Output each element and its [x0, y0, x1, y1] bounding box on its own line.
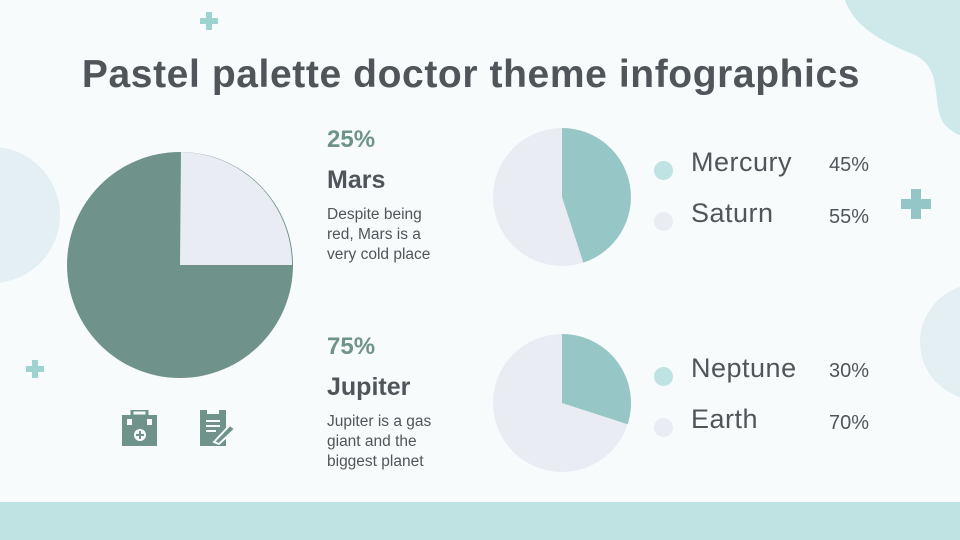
- legend: Mercury/Saturn: 45%: [829, 154, 869, 176]
- text block: Mars: Mars: [327, 166, 385, 194]
- text block: Mars: 25%: [327, 126, 375, 153]
- title: Pastel palette doctor theme infographics: [82, 53, 860, 96]
- icon: medical kit: [122, 410, 157, 446]
- chart: big pie: [67, 152, 293, 378]
- legend: Mercury/Saturn: 55%: [829, 206, 869, 228]
- legend: Mercury/Saturn: Mercury: [691, 147, 792, 177]
- chart: Mercury/Saturn pie: [493, 128, 631, 266]
- legend: Mercury/Saturn: [654, 147, 869, 231]
- text block: Jupiter: Jupiter is a gas giant and the biggest planet: [327, 413, 431, 470]
- icon: plus left: [26, 360, 44, 378]
- icon: plus top: [200, 12, 218, 30]
- text block: Jupiter: Jupiter: [327, 373, 410, 401]
- text block: Jupiter: 75%: [327, 333, 375, 360]
- icon: clipboard: [200, 410, 234, 446]
- legend: Mercury/Saturn: Saturn: [691, 198, 774, 228]
- text block: Mars: [327, 126, 430, 263]
- icon: plus right: [901, 189, 931, 219]
- chart: Neptune/Earth pie: [493, 334, 631, 472]
- legend: Neptune/Earth: Neptune: [691, 353, 797, 383]
- legend: Neptune/Earth: 30%: [829, 360, 869, 382]
- legend: Neptune/Earth: 70%: [829, 412, 869, 434]
- legend: Neptune/Earth: [654, 353, 869, 437]
- text block: Jupiter: [327, 333, 431, 470]
- legend: Neptune/Earth: Earth: [691, 404, 758, 434]
- text block: Mars: Despite being red, Mars is a very cold place: [327, 206, 430, 263]
